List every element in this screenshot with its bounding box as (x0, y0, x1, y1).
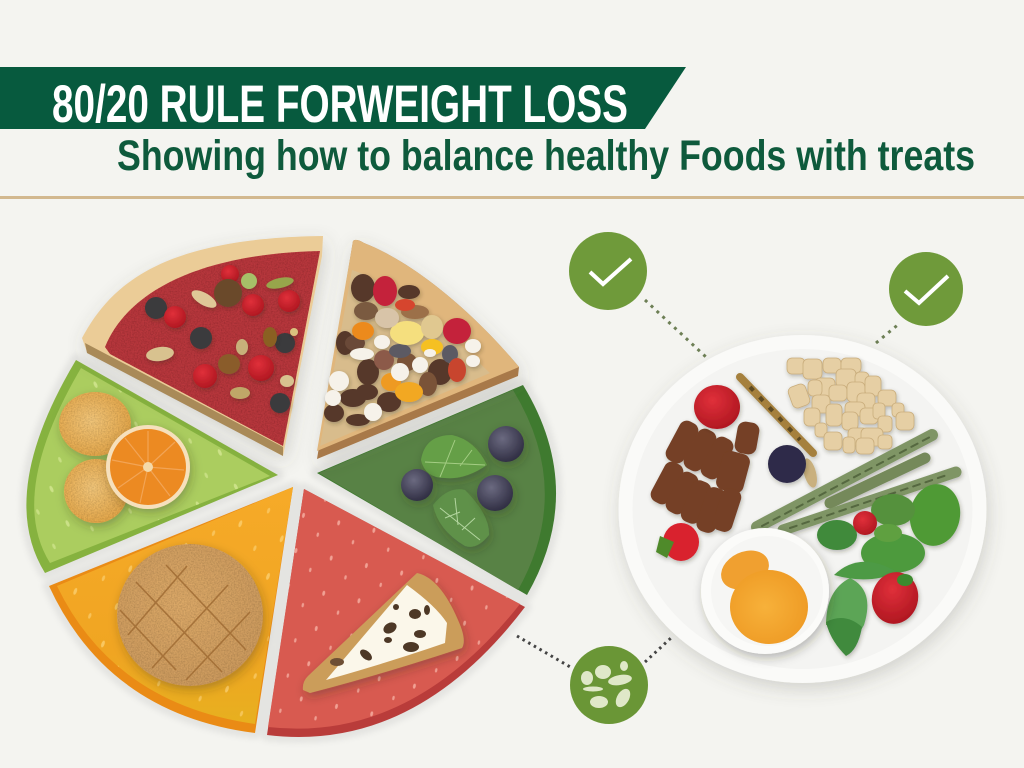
connector: plate to badge (645, 637, 672, 662)
panel: orange wedge (49, 487, 293, 733)
pie chart plate (26, 236, 556, 737)
panel: dark green wedge (317, 385, 556, 595)
title banner (0, 67, 686, 134)
connector: top left (645, 300, 706, 357)
asparagus (757, 435, 956, 530)
toppings (324, 274, 481, 426)
green bean pod (740, 377, 820, 489)
plate (618, 335, 986, 683)
food badge (570, 646, 648, 724)
icon: spinach leaf top (421, 435, 487, 478)
connector: pie to badge (517, 636, 572, 668)
crackers (787, 358, 914, 454)
title: 80/20 RULE FORWEIGHT LOSS (52, 75, 628, 134)
mini red pepper (656, 523, 699, 561)
bowl with apricots (701, 528, 829, 654)
icon: cheesecake slice (303, 573, 464, 693)
icon: spinach leaf bottom (433, 489, 489, 547)
icon: oat cookie (117, 544, 263, 686)
icon: biscuit bottom (64, 459, 128, 523)
panel: red wedge (267, 489, 525, 737)
blueberry (768, 445, 806, 483)
check badge left (569, 232, 647, 310)
connector: top right (876, 323, 900, 343)
icon: blueberry right (477, 475, 513, 511)
tomato (694, 385, 740, 429)
sausages (648, 418, 761, 535)
icon: small apricot (715, 543, 775, 597)
icon: large apricot (730, 570, 808, 644)
panel: lime green wedge (26, 360, 278, 573)
salad greens (817, 480, 965, 656)
toppings (145, 265, 300, 413)
icon: blueberry top (488, 426, 524, 462)
icon: biscuit top (59, 392, 131, 456)
check badge right (889, 252, 963, 326)
red tomato (866, 567, 924, 629)
icon: blueberry left (401, 469, 433, 501)
icon: orange slice (106, 425, 190, 509)
panel: vegetable pizza slice (317, 240, 519, 459)
panel: red berry pizza slice (82, 236, 323, 456)
